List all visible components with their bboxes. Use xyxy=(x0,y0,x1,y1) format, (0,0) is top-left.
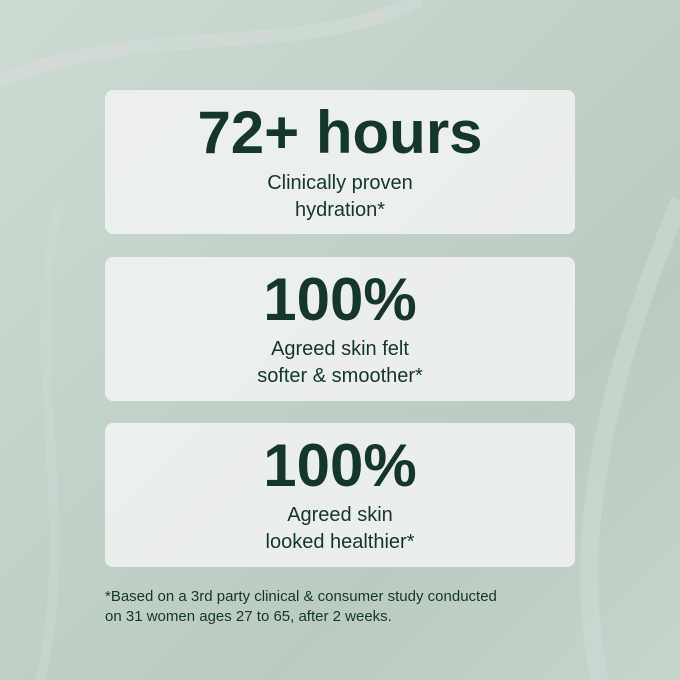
stat: 100%: 100% xyxy=(263,266,417,333)
stat: 72+ hours: 72+ hours xyxy=(197,99,483,166)
card: 72+ hours xyxy=(105,90,575,234)
footnote: on 31 women ages 27 to 65, after 2 weeks. xyxy=(105,608,392,625)
card: 100% softer xyxy=(105,257,575,401)
text: softer and smoother: softer & smoother* xyxy=(257,365,423,387)
text: softer and smoother xyxy=(257,338,423,387)
text: softer and smoother: Agreed skin felt xyxy=(271,338,409,360)
footnote: *Based on a 3rd party clinical & consumer study conducted xyxy=(105,588,497,605)
text: clinically proven hydration: Clinically proven xyxy=(267,172,413,194)
stat: 100%: 100% xyxy=(263,432,417,499)
footnote xyxy=(105,588,497,625)
text: looked healthier: looked healthier* xyxy=(266,531,414,553)
text: looked healthier: Agreed skin xyxy=(287,504,393,526)
text: looked healthier xyxy=(266,504,414,553)
card: 100% healthier xyxy=(105,423,575,567)
text: clinically proven hydration: hydration* xyxy=(295,199,385,221)
text: clinically proven hydration xyxy=(267,172,413,221)
